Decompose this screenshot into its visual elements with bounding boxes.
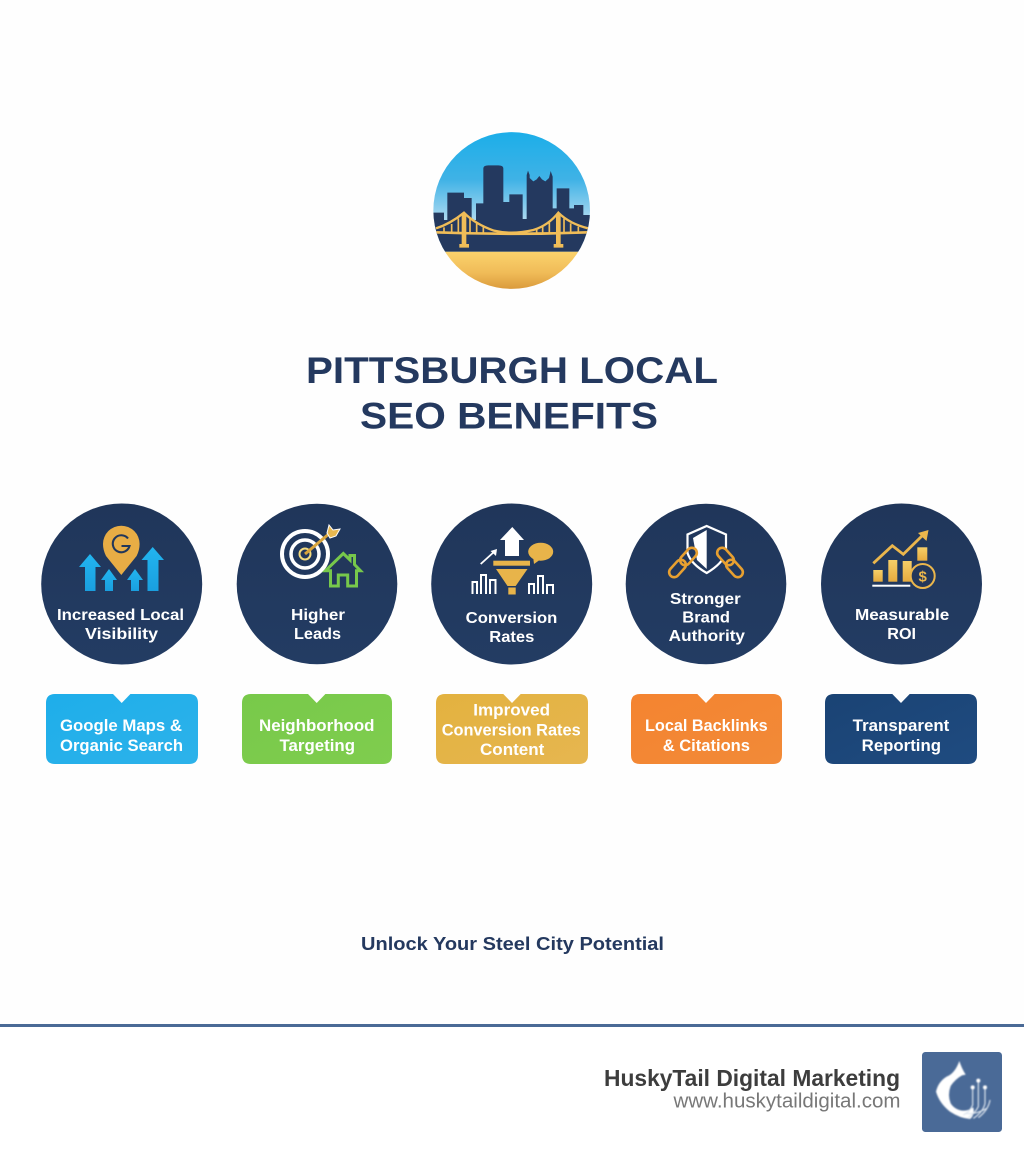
- label: stronger brand authority: Stronger: [670, 591, 741, 608]
- footer band: [0, 1027, 1024, 1154]
- circle: visibility background: [41, 504, 202, 664]
- label: stronger brand authority: Brand: [682, 610, 730, 626]
- tagline: Unlock Your Steel City Potential: [361, 934, 664, 954]
- tag: google maps and organic search: Organic Search: [60, 737, 183, 755]
- icon: growth chart with coin: $: [919, 568, 928, 586]
- label: conversion rates: Rates: [489, 629, 534, 646]
- icon: map pin with rising arrows: [79, 526, 164, 591]
- label: increased local visibility: Visibility: [85, 626, 158, 643]
- label: stronger brand authority: [669, 591, 745, 645]
- circle: leads background: [237, 504, 397, 664]
- icon: target, arrow and house: [282, 525, 360, 586]
- icon: growth chart with coin: [872, 530, 935, 588]
- panel: stronger brand authority: [626, 504, 786, 764]
- label: higher leads: Leads: [294, 626, 341, 643]
- title: PITTSBURGH LOCAL: [306, 350, 718, 391]
- panel: conversion rates: [431, 504, 592, 764]
- tag: neighborhood targeting: Neighborhood: [259, 717, 374, 735]
- icon: Pittsburgh skyline badge: [430, 130, 593, 290]
- footer divider: [0, 1024, 1024, 1027]
- label: increased local visibility: Increased Local: [57, 607, 184, 624]
- tag: local backlinks and citations: [631, 694, 782, 764]
- tag: transparent reporting: Reporting: [862, 737, 941, 755]
- panel: measurable roi: [821, 504, 982, 764]
- tag: improved conversion rates content: Conversion Rates: [442, 722, 581, 740]
- tag: neighborhood targeting: [242, 694, 392, 764]
- icon: funnel with arrow and charts: [472, 527, 553, 594]
- label: measurable roi: [855, 607, 949, 643]
- label: higher leads: Higher: [291, 607, 345, 624]
- tag: transparent reporting: Transparent: [853, 717, 950, 735]
- tag: improved conversion rates content: Content: [480, 741, 545, 759]
- label: measurable roi: ROI: [887, 626, 916, 643]
- circle: roi background: [821, 504, 982, 664]
- icon: shield with chain links: [667, 526, 745, 579]
- tag: transparent reporting: [825, 694, 977, 764]
- label: increased local visibility: [57, 607, 184, 643]
- tag: improved conversion rates content: Improved: [473, 702, 550, 720]
- panel: increased local visibility: [41, 504, 202, 764]
- circle: conversion background: [431, 504, 592, 664]
- panel: higher leads: [237, 504, 397, 764]
- tag: google maps and organic search: [46, 694, 198, 764]
- footer: company name: HuskyTail Digital Marketing: [604, 1065, 900, 1091]
- icon: husky tail logo: [922, 1052, 1002, 1132]
- tag: improved conversion rates content: [436, 694, 588, 764]
- circle: authority background: [626, 504, 786, 664]
- tag: local backlinks and citations: & Citations: [663, 737, 750, 755]
- tag: local backlinks and citations: Local Backlinks: [645, 717, 768, 735]
- label: higher leads: [291, 607, 345, 643]
- label: conversion rates: [466, 610, 557, 646]
- tag: google maps and organic search: Google Maps &: [60, 717, 182, 735]
- label: measurable roi: Measurable: [855, 607, 949, 624]
- footer: website: www.huskytaildigital.com: [672, 1090, 900, 1112]
- title: [306, 350, 718, 436]
- label: conversion rates: Conversion: [466, 610, 557, 627]
- label: stronger brand authority: Authority: [669, 628, 745, 645]
- tag: neighborhood targeting: Targeting: [280, 737, 355, 755]
- title: SEO BENEFITS: [360, 396, 658, 436]
